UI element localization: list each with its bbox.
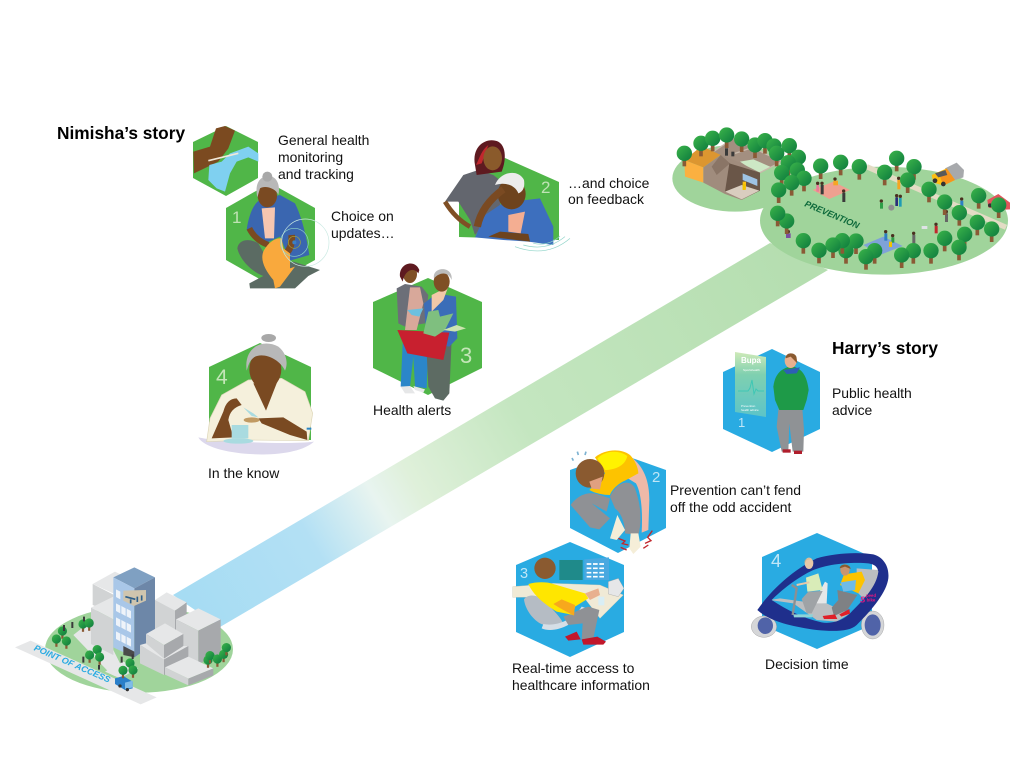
right tall block	[176, 608, 221, 664]
Bupa leaflet: Sportshealth	[743, 368, 760, 372]
two women with basket	[397, 263, 466, 401]
caption: choice on updates: updates…	[331, 225, 395, 241]
Bupa leaflet: Bupa	[741, 356, 762, 365]
woman with tea	[198, 334, 314, 454]
park label: PREVENTION	[803, 199, 861, 231]
man in green jacket	[773, 353, 809, 454]
road label: POINT OF ACCESS	[33, 643, 112, 685]
hexagon	[193, 126, 258, 196]
trees	[52, 618, 231, 678]
number 4: 4	[216, 366, 228, 389]
hexagon	[209, 343, 311, 440]
hexagon	[723, 349, 820, 452]
heading: Harry's story: Harry’s story	[832, 338, 938, 358]
caption: choice on updates: Choice on	[331, 208, 394, 224]
bike logo	[860, 593, 876, 604]
forecourt	[105, 662, 138, 678]
caption: prevention can't fend off: off the odd accident	[670, 499, 792, 515]
hexagon	[373, 278, 482, 395]
number 2: 2	[541, 178, 550, 197]
path behind tower	[73, 617, 123, 673]
heading: Nimisha's story: Nimisha’s story	[57, 123, 185, 143]
stepped block lower	[140, 643, 188, 675]
low block	[165, 657, 213, 685]
red car	[987, 194, 1010, 210]
large lawn	[760, 167, 1008, 275]
number 1: 1	[738, 415, 745, 430]
scene: point of access	[15, 567, 233, 704]
bike logo: S	[860, 595, 866, 604]
gray car	[945, 163, 964, 182]
Harry step 1	[723, 349, 820, 454]
Bupa leaflet: health advice	[741, 408, 759, 412]
man at desk	[513, 557, 624, 645]
caption: health alerts: Health alerts	[373, 402, 451, 418]
people	[725, 148, 963, 247]
small lawn	[672, 145, 798, 212]
woman with cat	[237, 172, 329, 288]
hexagon	[459, 158, 559, 240]
woman comforting seated woman	[445, 140, 570, 251]
hexagon	[516, 542, 624, 657]
Harry step 4	[751, 533, 888, 649]
man clutching ankle	[571, 450, 652, 554]
scene: prevention park	[672, 127, 1010, 275]
caption: public health advice: Public health	[832, 385, 912, 401]
caption: choice on feedback: …and choice	[568, 175, 650, 191]
house	[684, 138, 782, 200]
number 3: 3	[460, 343, 472, 368]
road	[15, 641, 157, 704]
front-left block	[91, 597, 113, 655]
Nimisha step 3	[373, 263, 482, 401]
caption: real-time access: healthcare information	[512, 677, 650, 693]
Nimisha step 4	[198, 334, 314, 454]
bike logo: bike	[867, 598, 876, 603]
Harry step 3	[513, 542, 624, 657]
caption: decision time: Decision time	[765, 656, 849, 672]
caption: real-time access: Real-time access to	[512, 660, 635, 676]
caption: in the know: In the know	[208, 465, 280, 481]
caption: public health advice: advice	[832, 402, 873, 418]
small sculpture and dog	[888, 205, 927, 229]
caption: general health: General health	[278, 132, 369, 148]
people	[64, 617, 133, 670]
number 2: 2	[652, 469, 660, 486]
hexagon	[570, 453, 666, 553]
stepped block upper	[146, 623, 183, 660]
caption: prevention can't fend off: Prevention can’t fend	[670, 482, 801, 498]
blue blanket	[863, 237, 903, 255]
hexagon	[762, 533, 872, 649]
Nimisha step 2	[445, 140, 570, 251]
velo taxi	[751, 553, 888, 639]
arm and gloved hands	[193, 126, 258, 192]
Nimisha step 1	[226, 172, 329, 288]
right rear block	[155, 592, 187, 640]
Nimisha: general health monitoring	[193, 126, 258, 196]
hexagon	[226, 183, 315, 285]
back block	[93, 572, 122, 613]
ground ellipse	[45, 606, 233, 693]
number 1: 1	[232, 208, 241, 227]
Harry step 2	[570, 450, 666, 554]
number 4: 4	[771, 550, 781, 571]
Bupa leaflet: Prevention	[741, 404, 756, 408]
caption: general health: and tracking	[278, 166, 354, 182]
number 3: 3	[520, 566, 528, 582]
van	[115, 676, 133, 691]
tan path	[867, 167, 1006, 227]
yellow car	[932, 168, 955, 186]
caption: general health: monitoring	[278, 149, 343, 165]
beam: path from point of access to prevention	[173, 243, 828, 627]
picnic blanket	[813, 182, 850, 199]
trees	[677, 127, 1006, 270]
blue tower	[113, 567, 155, 657]
caption: choice on feedback: on feedback	[568, 191, 644, 207]
bike logo: peed	[866, 593, 876, 598]
Bupa leaflet	[735, 352, 766, 417]
